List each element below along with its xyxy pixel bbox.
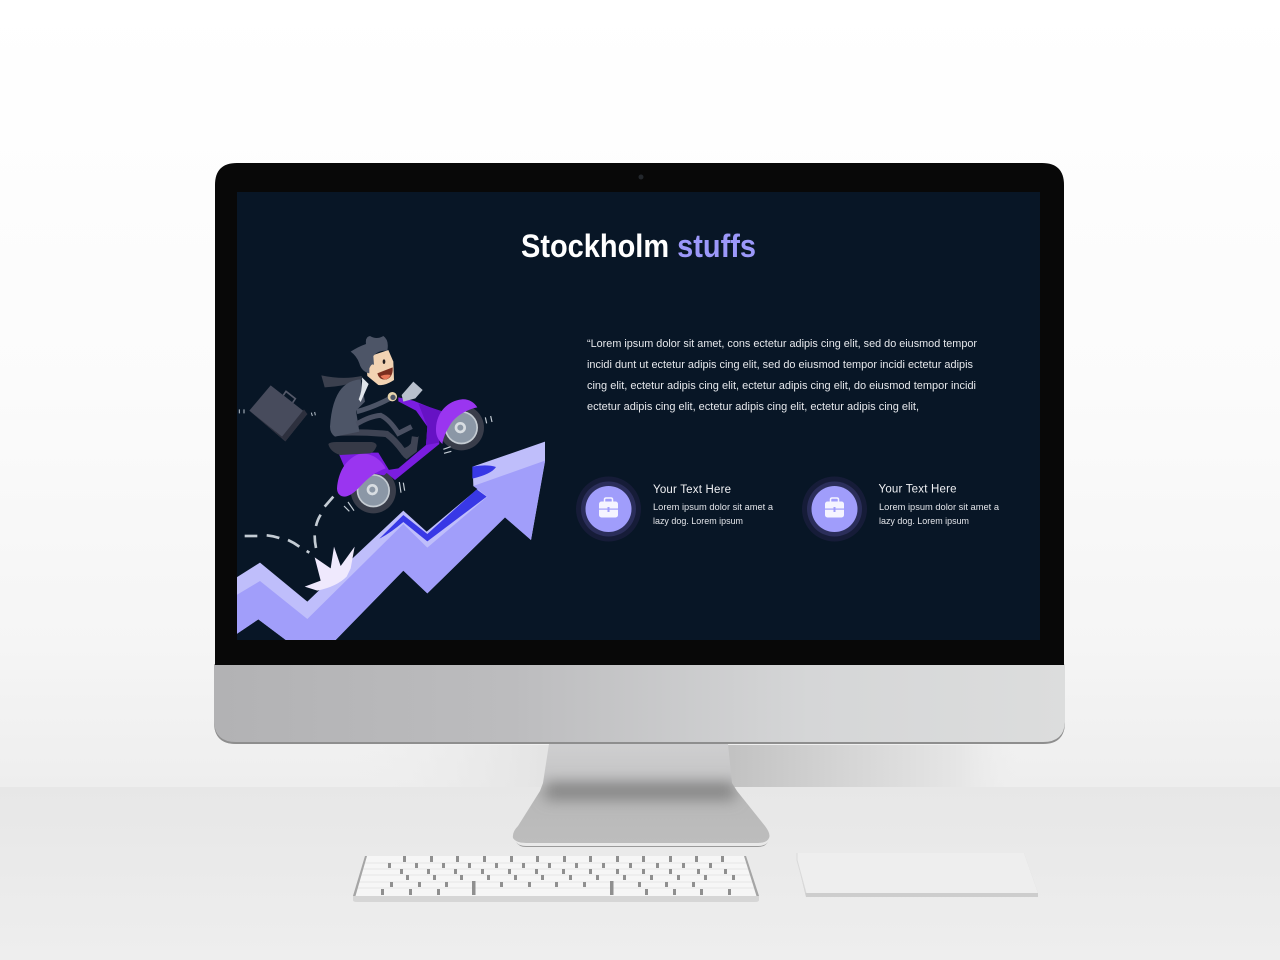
icon: briefcase badge 1 xyxy=(576,476,641,542)
monitor xyxy=(214,163,1065,744)
monitor stand xyxy=(513,744,770,847)
shoe xyxy=(401,436,419,459)
mouth xyxy=(377,367,393,380)
feature item 1 xyxy=(576,476,774,542)
body paragraph: “Lorem ipsum dolor sit amet, cons ectetur adipis cing elit, sed do eiusmod tempor xyxy=(587,338,977,350)
briefcase xyxy=(239,385,315,441)
scooter frame xyxy=(386,397,440,480)
front fender xyxy=(436,399,477,444)
trackpad xyxy=(797,853,1038,897)
item 1 heading: Your Text Here xyxy=(653,484,731,496)
hand on handlebar xyxy=(388,392,397,401)
item 1 text: Lorem ipsum dolor sit amet a xyxy=(653,502,774,513)
dashed motion path xyxy=(245,497,333,553)
rear wheel xyxy=(351,473,396,514)
impact burst xyxy=(305,547,355,591)
front wheel xyxy=(443,408,484,450)
title: Stockholm stuffs xyxy=(521,228,756,264)
item 2 heading: Your Text Here xyxy=(878,484,956,496)
arrow xyxy=(237,442,545,641)
motion ticks xyxy=(344,416,492,511)
lower leg xyxy=(337,432,415,452)
headlight glass xyxy=(402,382,423,402)
shirt collar xyxy=(359,377,369,402)
illustration: businessman on scooter riding a rising arrow xyxy=(237,336,545,641)
scooter xyxy=(328,382,492,513)
feature item 2 xyxy=(802,476,1000,542)
torso xyxy=(330,379,365,437)
slide screen xyxy=(237,192,1040,641)
monitor bezel xyxy=(215,163,1064,665)
businessman xyxy=(321,336,419,459)
hair xyxy=(351,336,388,373)
item 1 text: lazy dog. Lorem ipsum xyxy=(653,516,743,527)
body paragraph: cing elit, ectetur adipis cing elit, ectetur adipis cing elit, do eiusmod tempor incidi xyxy=(587,380,976,392)
eye xyxy=(383,359,385,364)
keyboard xyxy=(353,856,759,902)
monitor chin xyxy=(214,664,1065,744)
arm xyxy=(357,399,389,412)
seat xyxy=(328,442,377,455)
icon: briefcase badge 2 xyxy=(802,476,867,542)
item 1 text xyxy=(653,502,774,527)
item 2 text xyxy=(879,502,1000,527)
rear fender xyxy=(337,454,386,497)
item 2 text: lazy dog. Lorem ipsum xyxy=(879,516,969,527)
body paragraph: ectetur adipis cing elit, ectetur adipis cing elit, ectetur adipis cing elit, xyxy=(587,401,919,413)
head xyxy=(367,350,394,385)
upper leg xyxy=(357,415,412,433)
item 2 text: Lorem ipsum dolor sit amet a xyxy=(879,502,1000,513)
body paragraph xyxy=(587,338,977,413)
scarf xyxy=(321,375,362,387)
body paragraph: incidi dunt ut ectetur adipis cing elit, sed do eiusmod tempor incidi ectetur adipis xyxy=(587,359,973,371)
webcam xyxy=(638,174,644,180)
